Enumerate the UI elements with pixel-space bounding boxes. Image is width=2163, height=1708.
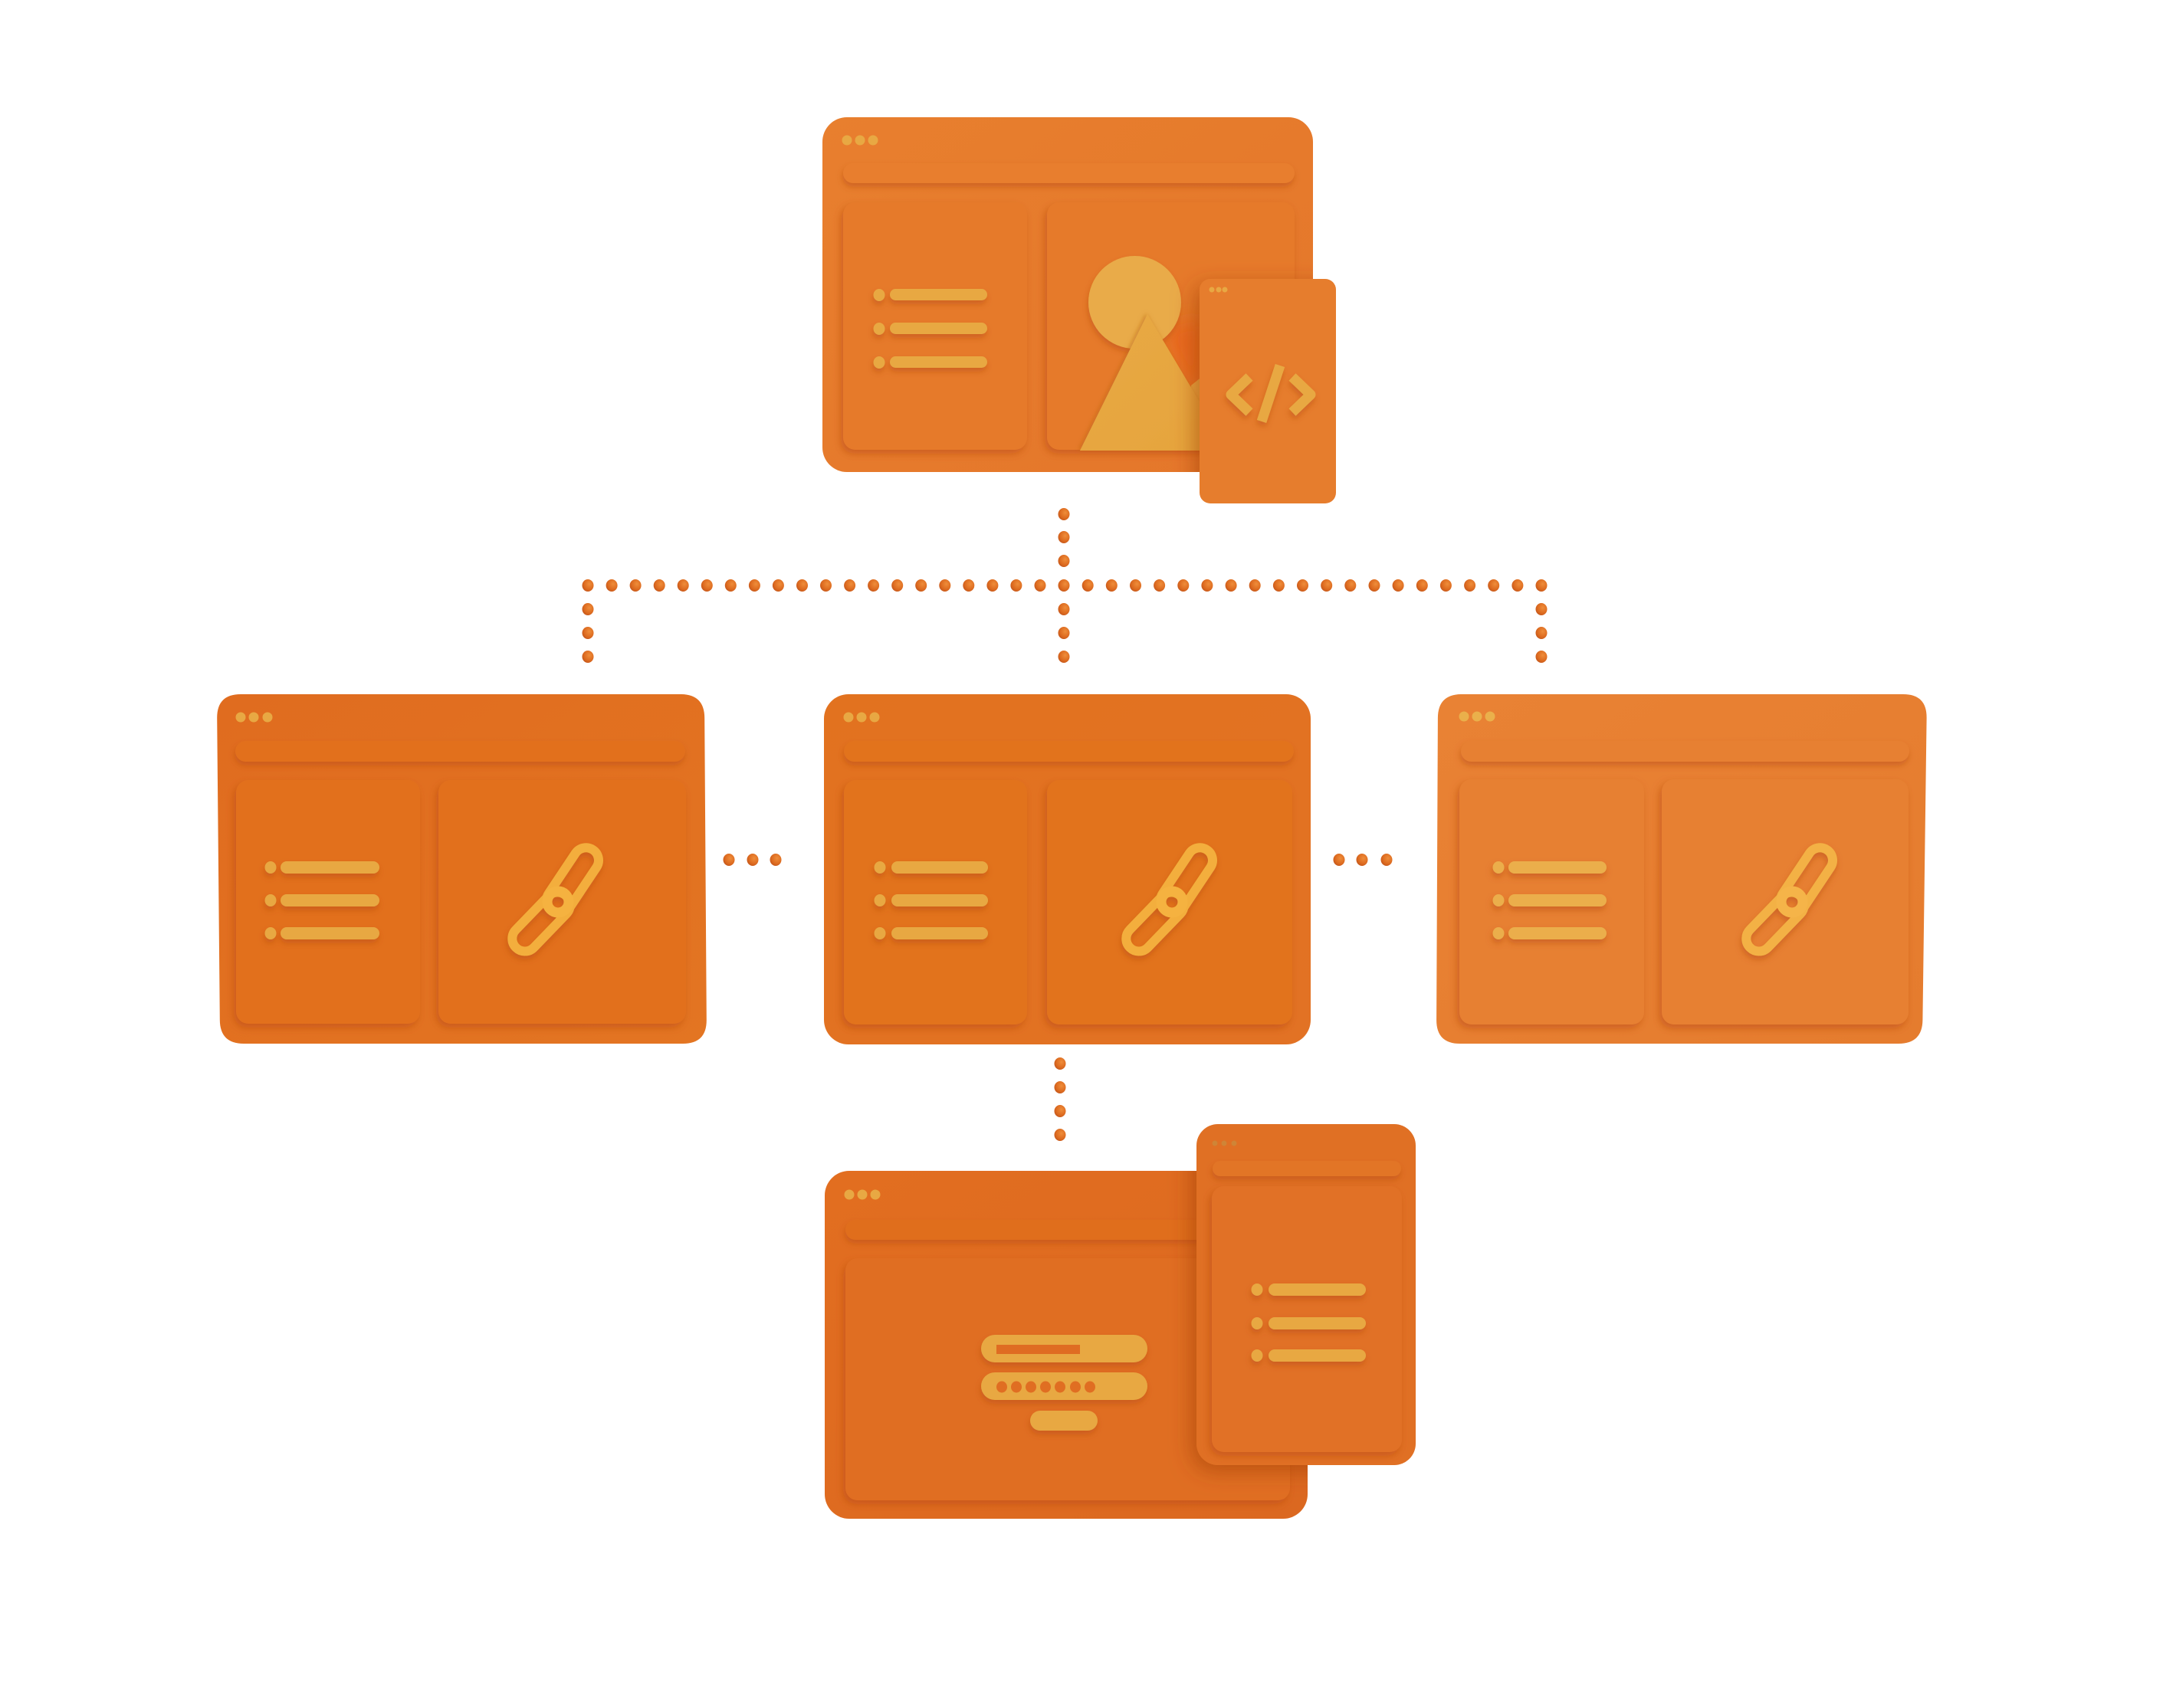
mobile window shadow on the page [1183,1171,1308,1480]
bottom window main panel [845,1258,1290,1500]
mobile address bar [1213,1161,1401,1176]
bottom window frame [825,1171,1308,1519]
right window: linked page [1436,694,1927,1044]
vertical dots: right drop [1536,603,1547,663]
middle window list [874,861,988,939]
left window link panel [438,780,686,1024]
image placeholder: mountain [1080,314,1229,451]
middle window text panel [844,780,1027,1024]
horizontal dotted line [583,579,1547,592]
middle window frame [824,694,1311,1044]
right window list [1493,861,1607,939]
left window address bar [235,741,685,762]
middle window controls [843,713,880,722]
username field [981,1335,1147,1362]
mobile list [1251,1283,1366,1362]
code card shadow on the window [1183,277,1313,472]
bottom window controls [845,1189,880,1200]
middle window address bar [844,741,1294,762]
image placeholder: shaded area behind the mountain [1164,318,1203,391]
vertical dots: left drop [583,603,593,663]
middle window link panel [1047,780,1292,1024]
top window controls [842,135,878,146]
top window address bar [843,163,1295,183]
image placeholder: sun [1088,256,1181,349]
top window frame [822,117,1313,472]
mobile content panel [1212,1186,1402,1452]
top window left panel [843,202,1027,450]
submit button [1030,1411,1098,1431]
code card [1200,279,1336,503]
login form [981,1335,1147,1431]
top window image panel [1047,202,1295,450]
right window frame [1436,694,1927,1044]
dotted connectors [583,508,1547,1141]
left window controls [236,713,273,722]
dots from middle page to bottom pages [1055,1057,1065,1141]
code card controls [1210,287,1228,293]
icon: chain link [1121,843,1217,956]
top window: home page with image and code card [822,117,1336,503]
icon: chain link [507,843,603,956]
middle window: linked page [824,694,1311,1044]
top window list [874,289,987,369]
right window controls [1459,711,1495,722]
icon: chain link [1741,843,1837,956]
password dots [996,1381,1095,1393]
left window list [265,861,379,939]
image placeholder: small mountain [1180,369,1246,451]
right window text panel [1459,779,1644,1024]
dots between left and middle pages [724,854,782,866]
code symbol [1231,366,1311,421]
vertical dots: centre trunk [1058,508,1070,663]
mobile window frame [1196,1124,1416,1465]
mobile window controls [1213,1140,1237,1146]
right window link panel [1662,779,1909,1024]
site structure diagram [217,117,1927,1519]
dots between middle and right pages [1334,854,1392,866]
bottom window: login page with mobile view [825,1124,1416,1519]
bottom window address bar [845,1220,1275,1240]
right window address bar [1461,741,1909,762]
left window text panel [236,780,420,1024]
password field [981,1372,1147,1400]
username value [996,1345,1080,1354]
left window frame [217,694,707,1044]
left window: linked page [217,694,707,1044]
